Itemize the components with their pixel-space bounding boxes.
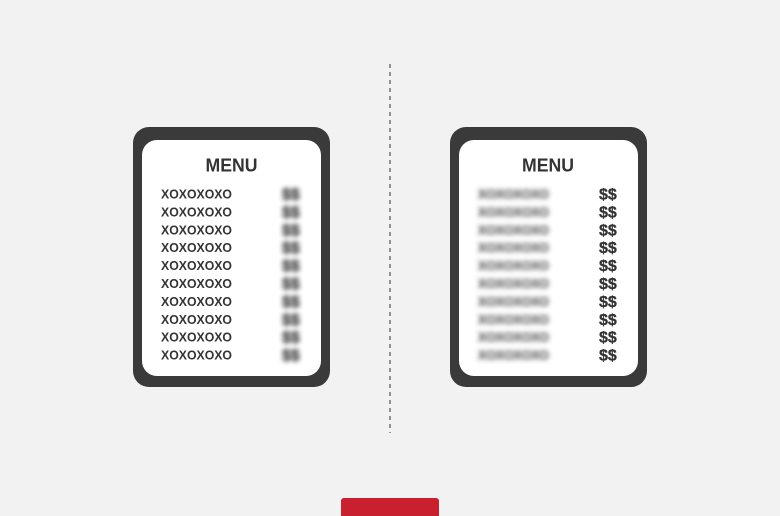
blurred prices: $$ xyxy=(282,258,300,275)
menu card frame xyxy=(450,127,647,387)
blurred item names xyxy=(478,188,549,363)
sharp prices: $$ xyxy=(599,312,617,329)
blurred prices: $$ xyxy=(282,240,300,257)
sharp prices: $$ xyxy=(599,258,617,275)
sharp prices: $$ xyxy=(599,222,617,239)
blurred item names: XOXOXOXO xyxy=(478,331,549,345)
sharp prices: $$ xyxy=(599,348,617,365)
sharp item names: XOXOXOXO xyxy=(161,277,232,291)
sharp prices: $$ xyxy=(599,330,617,347)
panel: right menu, item names blurred xyxy=(450,127,647,387)
sharp prices: $$ xyxy=(599,204,617,221)
blurred item names: XOXOXOXO xyxy=(478,313,549,327)
blurred item names: XOXOXOXO xyxy=(478,349,549,363)
sharp item names: XOXOXOXO xyxy=(161,205,232,219)
blurred prices: $$ xyxy=(282,330,300,347)
sharp item names: XOXOXOXO xyxy=(161,349,232,363)
sharp item names: XOXOXOXO xyxy=(161,241,232,255)
blurred item names: XOXOXOXO xyxy=(478,277,549,291)
sharp prices xyxy=(599,186,617,365)
sharp prices: $$ xyxy=(599,240,617,257)
sharp prices: $$ xyxy=(599,294,617,311)
sharp item names xyxy=(161,188,232,363)
heading: menu: MENU xyxy=(206,156,258,176)
heading: menu: MENU xyxy=(522,156,574,176)
sharp item names: XOXOXOXO xyxy=(161,331,232,345)
blurred prices: $$ xyxy=(282,294,300,311)
blurred prices: $$ xyxy=(282,276,300,293)
blurred prices: $$ xyxy=(282,312,300,329)
sharp item names: XOXOXOXO xyxy=(161,188,232,202)
blurred prices: $$ xyxy=(282,348,300,365)
blurred prices: $$ xyxy=(282,186,300,204)
menu card page xyxy=(142,140,321,376)
blurred item names: XOXOXOXO xyxy=(478,295,549,309)
sharp item names: XOXOXOXO xyxy=(161,223,232,237)
blurred prices: $$ xyxy=(282,222,300,239)
menu card frame xyxy=(133,127,330,387)
blurred item names: XOXOXOXO xyxy=(478,241,549,255)
blurred prices: $$ xyxy=(282,204,300,221)
panel: left menu, prices blurred xyxy=(133,127,330,387)
blurred item names: XOXOXOXO xyxy=(478,188,549,202)
sharp item names: XOXOXOXO xyxy=(161,313,232,327)
blurred item names: XOXOXOXO xyxy=(478,259,549,273)
blurred prices xyxy=(282,186,300,365)
blurred item names: XOXOXOXO xyxy=(478,205,549,219)
sharp item names: XOXOXOXO xyxy=(161,259,232,273)
blurred item names: XOXOXOXO xyxy=(478,223,549,237)
red button, cropped at bottom edge xyxy=(341,498,439,516)
sharp prices: $$ xyxy=(599,186,617,204)
menu card page xyxy=(459,140,638,376)
sharp prices: $$ xyxy=(599,276,617,293)
sharp item names: XOXOXOXO xyxy=(161,295,232,309)
